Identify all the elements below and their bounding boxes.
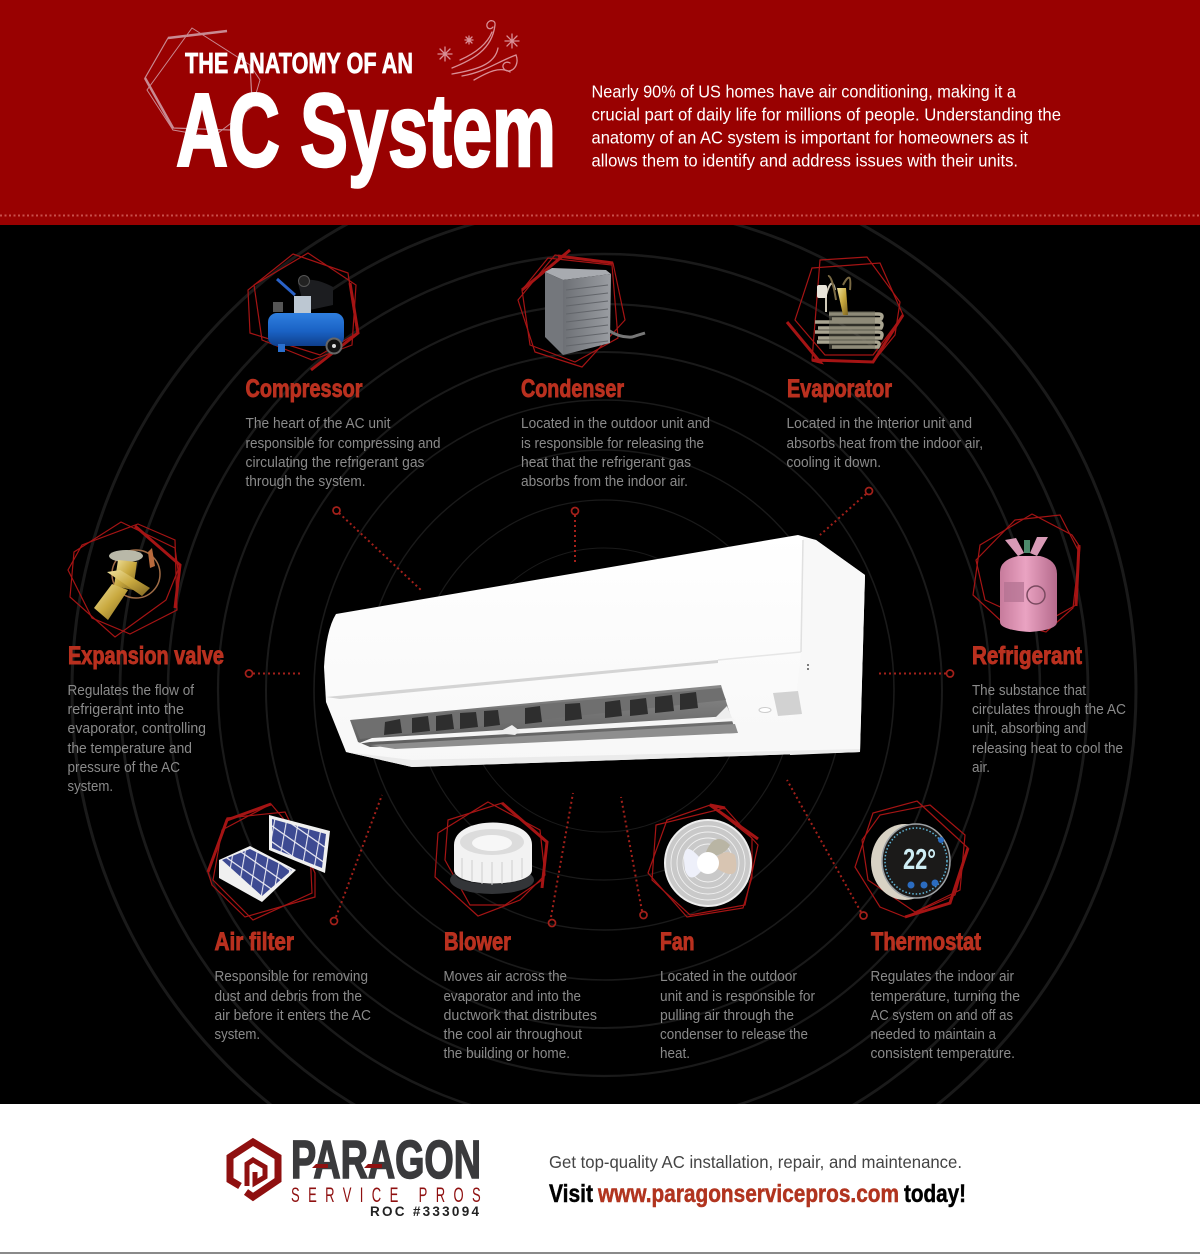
text block: condenser: is responsible for releasing the: [521, 436, 704, 452]
panel: refrigerant: [972, 514, 1126, 776]
logo: paragon service pros: [230, 1130, 481, 1219]
icon: refrigerant: [973, 514, 1080, 632]
text block: blower: evaporator and into the: [444, 989, 581, 1005]
text block: blower: ductwork that distributes: [444, 1008, 597, 1024]
footer band: [0, 1104, 1200, 1254]
concentric background rings: [72, 158, 1136, 1222]
text block: condenser: Located in the outdoor unit and: [521, 416, 710, 432]
title: AC System: AC System: [176, 73, 556, 189]
text block: air filter: [214, 969, 371, 1043]
connector lines: [246, 488, 954, 926]
title: the anatomy of an: THE ANATOMY OF AN: [185, 48, 413, 80]
heading: evaporator: Evaporator: [787, 375, 892, 403]
text block: fan: Located in the outdoor: [660, 969, 797, 985]
text block: expansion valve: evaporator, controlling: [68, 721, 206, 737]
call to action text: [549, 1152, 966, 1208]
heading: thermostat: Thermostat: [871, 928, 982, 956]
intro text block: allows them to identify and address issues with their units.: [592, 150, 1018, 170]
text block: fan: [660, 969, 815, 1062]
text block: condenser: heat that the refrigerant gas: [521, 455, 691, 471]
text block: expansion valve: system.: [68, 779, 113, 795]
text block: blower: Moves air across the: [444, 969, 567, 985]
icon: thermostat: 22°: [903, 844, 936, 876]
text block: compressor: responsible for compressing and: [246, 436, 440, 452]
text block: thermostat: [870, 969, 1020, 1062]
text block: blower: the building or home.: [444, 1046, 570, 1062]
text block: air filter: Responsible for removing: [214, 969, 368, 985]
text block: expansion valve: Regulates the flow of: [68, 683, 195, 699]
icon: blower: [435, 802, 547, 916]
icon: expansion valve: [68, 522, 180, 637]
license number: ROC #333094: [370, 1204, 479, 1219]
panel: expansion valve: [68, 522, 224, 795]
panel: air filter: [208, 804, 371, 1043]
text block: air filter: system.: [214, 1027, 260, 1043]
text block: expansion valve: refrigerant into the: [68, 702, 184, 718]
text block: fan: heat.: [660, 1046, 690, 1062]
call to action text: www.paragonservicepros.com: [597, 1180, 899, 1208]
text block: compressor: [246, 416, 440, 490]
icon: condenser: [518, 250, 645, 367]
text block: thermostat: needed to maintain a: [870, 1027, 997, 1043]
icon: air filter: [208, 804, 330, 920]
text block: refrigerant: releasing heat to cool the: [972, 741, 1123, 757]
text block: compressor: circulating the refrigerant gas: [246, 455, 424, 471]
logo tagline: SERVICE PROS: [291, 1183, 481, 1207]
text block: fan: unit and is responsible for: [660, 989, 815, 1005]
call to action text: Get top-quality AC installation, repair, and maintenance.: [549, 1152, 962, 1172]
call to action text: Visit: [549, 1180, 594, 1208]
text block: refrigerant: unit, absorbing and: [972, 721, 1086, 737]
text block: refrigerant: [972, 683, 1126, 776]
text block: expansion valve: the temperature and: [68, 741, 192, 757]
icon: compressor: [248, 253, 358, 370]
dark background: [0, 225, 1200, 1104]
heading: condenser: Condenser: [521, 375, 624, 403]
text block: fan: condenser to release the: [660, 1027, 808, 1043]
intro text block: crucial part of daily life for millions of people. Understanding the: [592, 104, 1061, 124]
logo wordmark: PARAGON: [291, 1130, 481, 1190]
icon: wind and snowflakes: [438, 21, 519, 80]
header band: [0, 0, 1200, 225]
text block: thermostat: Regulates the indoor air: [870, 969, 1014, 985]
panel: evaporator: [786, 257, 983, 471]
heading: air filter: Air filter: [214, 928, 294, 956]
illustration: air conditioner indoor unit: [324, 535, 865, 767]
heading: fan: Fan: [660, 928, 694, 956]
text block: evaporator: absorbs heat from the indoor air,: [786, 436, 983, 452]
text block: air filter: dust and debris from the: [214, 989, 362, 1005]
panel: thermostat: [855, 801, 1020, 1062]
heading: blower: Blower: [444, 928, 511, 956]
text block: expansion valve: [68, 683, 206, 795]
text block: fan: pulling air through the: [660, 1008, 794, 1024]
intro text block: [592, 82, 1061, 170]
panel: condenser: [518, 250, 710, 490]
call to action text: today!: [904, 1180, 966, 1208]
text block: condenser: [521, 416, 710, 490]
text block: evaporator: [786, 416, 983, 471]
heading: expansion valve: Expansion valve: [68, 642, 224, 670]
heading: compressor: Compressor: [246, 375, 363, 403]
text block: thermostat: consistent temperature.: [870, 1046, 1015, 1062]
text block: blower: [444, 969, 597, 1062]
text block: refrigerant: circulates through the AC: [972, 702, 1126, 718]
icon: thermostat: [855, 801, 968, 917]
text block: evaporator: cooling it down.: [786, 455, 881, 471]
text block: condenser: absorbs from the indoor air.: [521, 474, 688, 490]
text block: thermostat: AC system on and off as: [870, 1008, 1013, 1024]
intro text block: anatomy of an AC system is important for homeowners as it: [592, 128, 1028, 148]
intro text block: Nearly 90% of US homes have air conditioning, making it a: [592, 82, 1016, 102]
logo accent marks: [312, 1164, 382, 1168]
text block: evaporator: Located in the interior unit and: [786, 416, 972, 432]
logo mark: [230, 1142, 278, 1197]
heading: refrigerant: Refrigerant: [972, 642, 1083, 670]
panel: blower: [435, 802, 597, 1062]
text block: refrigerant: The substance that: [972, 683, 1086, 699]
text block: compressor: The heart of the AC unit: [246, 416, 390, 432]
text block: thermostat: temperature, turning the: [870, 989, 1020, 1005]
icon: header hexagon outline: [145, 28, 260, 137]
text block: refrigerant: air.: [972, 760, 990, 776]
text block: blower: the cool air throughout: [444, 1027, 582, 1043]
icon: fan: [648, 805, 758, 917]
panel: fan: [648, 805, 815, 1062]
icon: evaporator: [787, 257, 903, 362]
text block: compressor: through the system.: [246, 474, 366, 490]
text block: expansion valve: pressure of the AC: [68, 760, 180, 776]
text block: air filter: air before it enters the AC: [214, 1008, 371, 1024]
panel: compressor: [246, 253, 440, 490]
